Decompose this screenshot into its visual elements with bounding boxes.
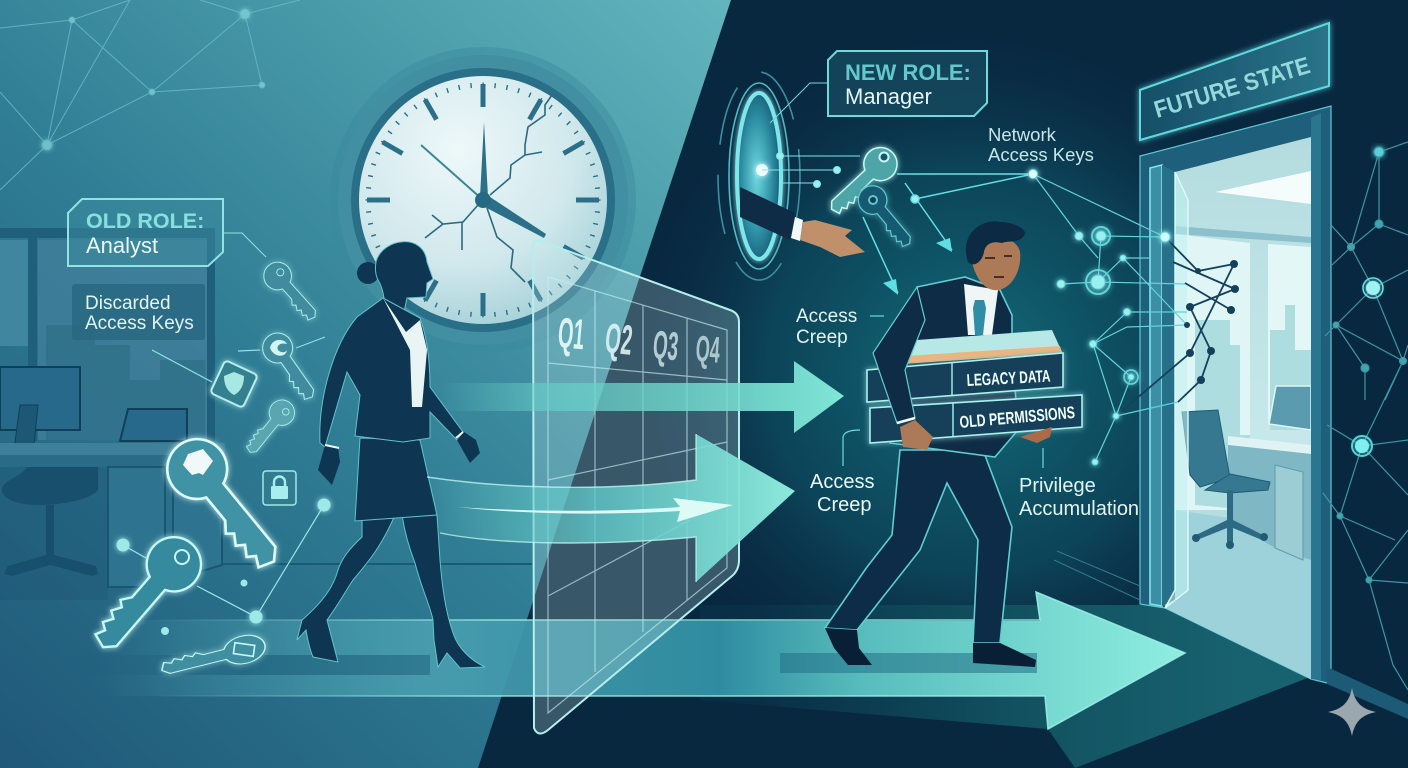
scattered nodes (117, 499, 330, 634)
network centre right (897, 170, 1239, 465)
new role label (828, 51, 987, 116)
woman: head (375, 242, 433, 312)
desk (1228, 436, 1311, 454)
access creep upper label: Access (796, 306, 857, 327)
discarded keys (82, 257, 325, 684)
man: head (970, 237, 1020, 290)
quarterly calendar panel (533, 241, 739, 734)
box old permissions (870, 395, 1082, 443)
panel body (533, 241, 739, 734)
text: network access keys (988, 124, 1094, 165)
access creep lower label: Creep (817, 494, 871, 516)
label: old role: Analyst (86, 233, 158, 258)
floor arrow (100, 592, 1185, 729)
door frame (1140, 106, 1331, 684)
woman: bun (357, 262, 379, 284)
label connector: old role (223, 233, 266, 257)
sign: future state (1140, 23, 1329, 140)
floor (1165, 510, 1311, 679)
label connector: new role (770, 83, 828, 123)
portal lines (762, 152, 860, 188)
text: discarded access keys: Access Keys (85, 313, 194, 334)
room interior (1165, 137, 1311, 679)
arm sleeve (740, 187, 795, 240)
left office backdrop (0, 228, 532, 600)
orange paper stripe (903, 346, 1062, 364)
dark network lines (1116, 237, 1235, 416)
bright network lines (897, 174, 1201, 462)
sign: future state: FUTURE STATE (1151, 51, 1313, 123)
woman: cuffs (325, 432, 463, 448)
chair base (1194, 490, 1265, 542)
clock hands (421, 122, 546, 238)
doorway (1140, 106, 1331, 684)
label: old role (68, 199, 223, 266)
quarter labels (556, 310, 722, 372)
arrow: upper (440, 361, 844, 433)
woman: jacket and arms (320, 298, 463, 447)
right frame (1311, 113, 1321, 680)
text: network access keys: Access Keys (988, 144, 1094, 165)
access creep upper label: Creep (796, 327, 848, 348)
arrow: inner swoosh (457, 498, 733, 522)
teal glow behind man (480, 0, 1408, 768)
network top left (0, 0, 300, 190)
window beam (1175, 226, 1311, 243)
papers (903, 330, 1062, 362)
quarter labels: Q4 (694, 329, 722, 372)
access creep lower label: Access (810, 471, 874, 493)
open door glass (1165, 172, 1188, 608)
arrow: middle (427, 434, 795, 582)
text: discarded access keys: Discarded (85, 293, 171, 314)
woman: back leg (297, 515, 395, 662)
new role label: Manager (845, 84, 932, 109)
man carrying boxes (825, 221, 1036, 667)
woman silhouette (297, 242, 485, 668)
key: small top (258, 257, 325, 326)
key: swirl badge (257, 327, 324, 406)
icon: padlock (263, 471, 296, 505)
chair back (1182, 410, 1230, 487)
key: large lower (82, 526, 212, 665)
key: floor (158, 631, 268, 684)
privilege accumulation label: Accumulation (1019, 498, 1139, 520)
privilege accumulation label (1019, 475, 1139, 520)
door columns (1150, 165, 1162, 606)
box legacy data: LEGACY DATA (966, 368, 1051, 391)
clock minute ticks (368, 85, 598, 315)
watermark star (1328, 688, 1376, 736)
monitor (1269, 386, 1311, 430)
window panes (1175, 234, 1311, 510)
man: legs (825, 450, 1012, 643)
access creep upper label (796, 306, 857, 348)
floor arrow upper edge (150, 592, 1185, 729)
box legacy data (867, 353, 1063, 402)
box old permissions: OLD PERMISSIONS (959, 404, 1076, 433)
man: torso (890, 277, 1018, 457)
cuff (791, 217, 803, 241)
new role label: NEW ROLE: (845, 60, 971, 85)
man: shoes (825, 628, 1036, 667)
floor shadow strip right (780, 653, 1037, 673)
panel grid (548, 277, 727, 713)
floor band: dark floor right (700, 605, 1310, 768)
man: shirt and tie (964, 284, 998, 335)
key arrows (863, 174, 1033, 295)
arm and hand from portal (740, 187, 865, 257)
key: upper new (821, 141, 904, 222)
label: old role: OLD ROLE: (86, 209, 204, 233)
bright nodes (1028, 170, 1170, 465)
desk and chair (1182, 386, 1311, 560)
privilege accumulation label: Privilege (1019, 475, 1096, 497)
woman: blouse (383, 298, 427, 407)
clock hour ticks (367, 84, 599, 316)
portal (718, 72, 860, 280)
text: discarded access keys (85, 293, 194, 334)
icon: shield tile (210, 360, 258, 408)
quarter labels: Q3 (651, 322, 680, 369)
arrow: middle edges (427, 434, 696, 582)
light left background (0, 0, 731, 768)
man: hair (966, 221, 1025, 264)
chair seat (1205, 474, 1270, 493)
quarter labels: Q1 (556, 310, 586, 360)
clock (330, 47, 636, 353)
new keys (821, 141, 920, 253)
woman: left hand (318, 445, 340, 485)
panel: discarded keys backing (72, 284, 205, 340)
baseboard right (1327, 667, 1408, 719)
clock cracks (425, 95, 552, 282)
man: sleeve and hands (873, 287, 1052, 450)
connector: upper access creep (870, 315, 884, 317)
key: large bright (155, 427, 297, 581)
woman: right hand (457, 432, 480, 463)
connector: discarded keys (152, 337, 325, 382)
access creep lower label (810, 471, 874, 516)
key: small falling (240, 395, 300, 460)
key: lower new (853, 180, 920, 253)
wall streaks (1054, 551, 1140, 600)
ceiling light (1215, 171, 1311, 204)
man: face details (985, 256, 1012, 277)
stacked boxes (867, 330, 1082, 443)
quarter labels: Q2 (603, 314, 635, 364)
network far right (1323, 142, 1408, 690)
floor shadow strip left (60, 655, 430, 675)
hand (800, 220, 865, 257)
dark nodes (1184, 260, 1239, 384)
connector: lower access creep (843, 430, 860, 466)
connector: privilege (1042, 448, 1044, 468)
woman: skirt (355, 438, 437, 521)
text: network access keys: Network (988, 124, 1057, 145)
woman: front leg (402, 515, 485, 668)
